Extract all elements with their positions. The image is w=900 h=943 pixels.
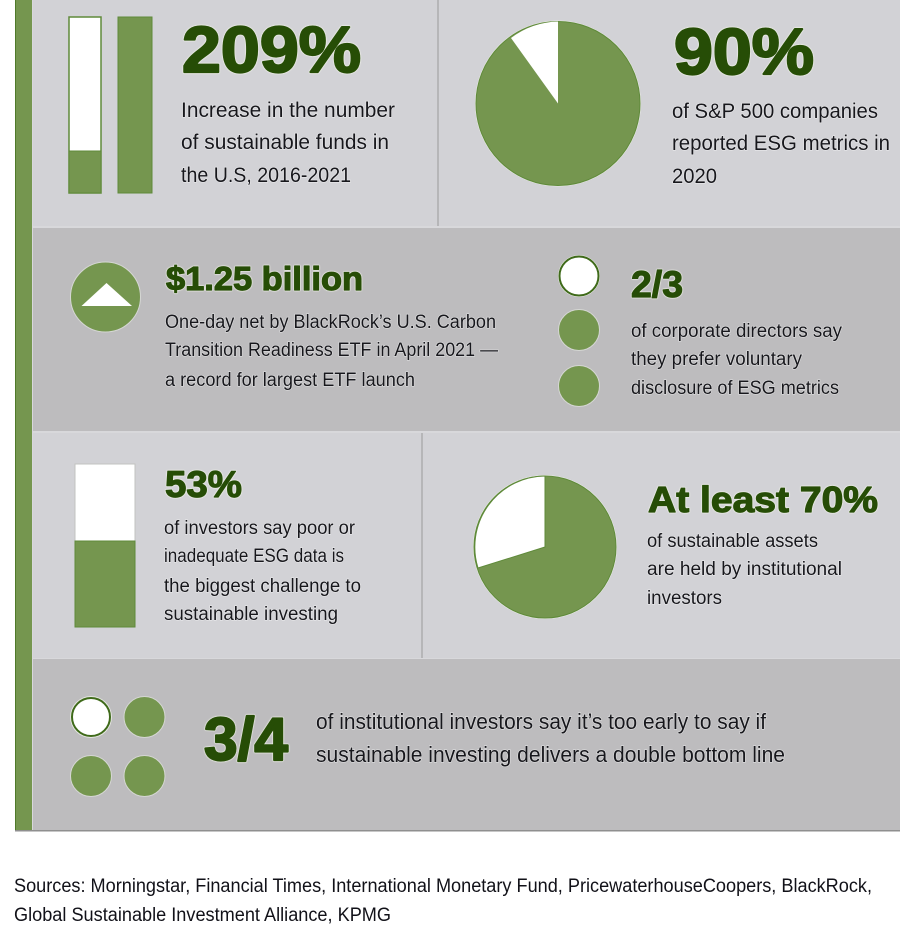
text: institutional holdings: of sustainable assets [647, 531, 818, 552]
heading: 209%: 209% [182, 13, 361, 86]
text: double bottom line: sustainable investing delivers a double bottom line [316, 742, 785, 767]
text: double bottom line: of institutional investors say it’s too early to say if [316, 709, 767, 734]
panel: at least 70% [423, 433, 900, 658]
icon: three circles, one white [558, 255, 600, 406]
vertical divider: third row [421, 433, 423, 658]
panel: $1.25 billion and 2/3 band [33, 228, 900, 431]
text: ESG data challenge: the biggest challenge to [164, 576, 361, 597]
text: ESG data challenge: of investors say poor or [164, 518, 356, 539]
sources: Sources: Morningstar, Financial Times, International Monetary Fund, PricewaterhouseCoopers, BlackRock, [14, 876, 872, 897]
icon: 53 percent bar [75, 464, 135, 627]
text: increase in funds: of sustainable funds in [181, 131, 389, 154]
heading: $1.25 billion: $1.25 billion [166, 260, 363, 297]
sources: Global Sustainable Investment Alliance, KPMG [14, 905, 391, 926]
left accent bar [15, 0, 32, 831]
text: S&P 500 ESG reporting: 2020 [672, 165, 717, 188]
text: corporate directors: of corporate directors say [631, 321, 842, 342]
text: increase in funds: the U.S, 2016-2021 [181, 164, 351, 187]
text: ESG data challenge [164, 518, 361, 625]
chart: 90 percent pie [475, 20, 641, 186]
panel: 209% increase in sustainable funds [33, 0, 437, 226]
chart: 70 percent pie [473, 475, 617, 619]
heading: 53%: 53% [165, 464, 242, 505]
text: corporate directors: disclosure of ESG metrics [631, 378, 839, 399]
text: S&P 500 ESG reporting: of S&P 500 companies [672, 100, 878, 123]
panel: 3/4 of institutional investors [15, 659, 900, 832]
text: institutional holdings: investors [647, 588, 722, 609]
text: institutional holdings: are held by institutional [647, 559, 842, 580]
text: S&P 500 ESG reporting [672, 100, 890, 188]
text: increase in funds [181, 99, 395, 187]
heading: 90%: 90% [674, 15, 814, 88]
icon: four circles, one white [70, 696, 165, 796]
panel: 53% of investors [33, 433, 421, 658]
vertical divider: top row [437, 0, 439, 226]
text: increase in funds: Increase in the number [181, 99, 395, 122]
text: BlackRock ETF launch [165, 312, 498, 391]
text: BlackRock ETF launch: One-day net by BlackRock’s U.S. Carbon [165, 312, 496, 333]
text: ESG data challenge: inadequate ESG data is [164, 546, 344, 567]
icon: two comparison bars [69, 17, 152, 193]
text: institutional holdings [647, 531, 842, 609]
text: S&P 500 ESG reporting: reported ESG metrics in [672, 132, 890, 155]
text: ESG data challenge: sustainable investing [164, 604, 338, 625]
icon: up triangle in circle [70, 262, 140, 332]
heading: At least 70%: At least 70% [648, 479, 878, 520]
text: double bottom line [316, 709, 785, 767]
text: corporate directors: they prefer voluntary [631, 349, 802, 370]
panel: 90% of S&P 500 companies [439, 0, 900, 226]
text: BlackRock ETF launch: Transition Readiness ETF in April 2021 — [165, 340, 498, 361]
text: BlackRock ETF launch: a record for largest ETF launch [165, 370, 415, 391]
heading: 2/3: 2/3 [631, 264, 683, 305]
heading: 3/4: 3/4 [204, 706, 289, 773]
sources [14, 876, 872, 926]
text: corporate directors [631, 321, 842, 399]
